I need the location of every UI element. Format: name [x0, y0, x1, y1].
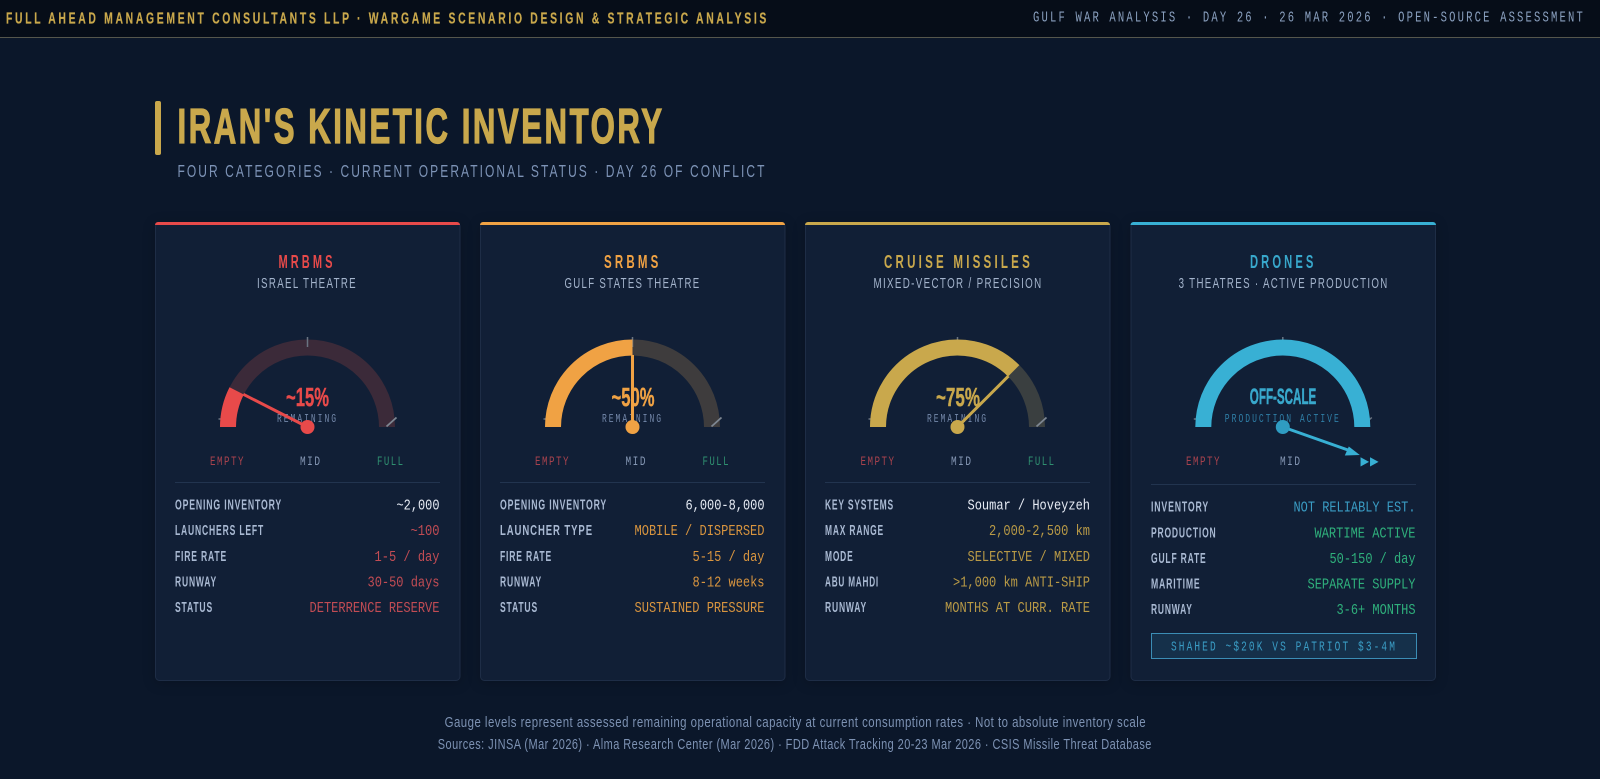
data rows: 1-5 / day — [374, 550, 440, 566]
gauge legend: FULL — [702, 455, 730, 469]
data rows: STATUS — [175, 600, 213, 616]
gauge: 75% remaining — [868, 337, 1046, 434]
card heading: DRONES — [1250, 252, 1316, 272]
data rows: LAUNCHER TYPE — [500, 523, 593, 539]
gauge: off-scale — [1194, 337, 1372, 456]
data rows: RUNWAY — [175, 574, 217, 590]
data rows: ~2,000 — [396, 498, 440, 514]
gauge legend: MID — [626, 455, 647, 469]
header bar — [0, 0, 1600, 38]
title: IRAN'S KINETIC INVENTORY — [178, 100, 664, 154]
data rows — [1151, 500, 1416, 619]
gauge legend: MID — [300, 455, 322, 469]
data rows: >1,000 km ANTI-SHIP — [953, 576, 1090, 592]
panel: MRBMs — [155, 222, 460, 680]
callout: cost comparison: SHAHED ~$20K VS PATRIOT $3-4M — [1171, 640, 1397, 656]
gauge: 50% remaining — [544, 337, 722, 434]
data rows: 50-150 / day — [1330, 552, 1416, 568]
data rows: KEY SYSTEMS — [825, 498, 894, 514]
data rows: FIRE RATE — [500, 549, 552, 565]
footer sources: Sources: JINSA (Mar 2026) · Alma Research Center (Mar 2026) · FDD Attack Tracking 20-23 Mar 2026 · CSIS Missile Threat Database — [438, 737, 1152, 753]
data rows: ABU MAHDI — [825, 574, 879, 590]
data rows: OPENING INVENTORY — [500, 498, 607, 514]
data rows: OPENING INVENTORY — [175, 498, 282, 514]
data rows: MARITIME — [1151, 576, 1200, 592]
gauge legend: ▶▶ — [1360, 454, 1380, 468]
data rows: 3-6+ MONTHS — [1336, 603, 1416, 619]
data rows: SEPARATE SUPPLY — [1308, 578, 1416, 594]
gauge legend — [210, 455, 404, 469]
data rows — [500, 498, 765, 617]
data rows: NOT RELIABLY EST. — [1294, 500, 1416, 516]
data rows — [825, 498, 1090, 617]
gauge legend: MID — [1280, 455, 1302, 469]
data rows: INVENTORY — [1151, 500, 1209, 516]
data rows: Soumar / Hoveyzeh — [968, 498, 1090, 514]
card subheading: MIXED-VECTOR / PRECISION — [874, 276, 1042, 292]
data rows: 5-15 / day — [692, 550, 765, 566]
gauge: 50% remaining: ~50% — [612, 382, 654, 412]
data rows: ~100 — [410, 524, 440, 540]
data rows: RUNWAY — [500, 574, 542, 590]
data rows: SUSTAINED PRESSURE — [634, 601, 764, 617]
data rows: WARTIME ACTIVE — [1314, 526, 1416, 542]
data rows: LAUNCHERS LEFT — [175, 523, 264, 539]
gauge: 15% remaining: REMAINING — [277, 412, 338, 426]
header: firm name: FULL AHEAD MANAGEMENT CONSULTANTS LLP · WARGAME SCENARIO DESIGN & STRATEGIC ANALYSIS — [6, 10, 769, 27]
panel: drones — [1130, 222, 1436, 680]
gauge legend: EMPTY — [860, 455, 896, 469]
data rows — [175, 498, 440, 617]
panel: cruise missiles — [805, 222, 1110, 680]
card heading: MRBMS — [278, 252, 336, 272]
gauge legend: MID — [951, 455, 972, 469]
data rows: MOBILE / DISPERSED — [634, 524, 764, 540]
data rows: SELECTIVE / MIXED — [968, 550, 1090, 566]
panel: SRBMs — [480, 222, 785, 680]
card heading: SRBMS — [604, 252, 662, 272]
gauge: 75% remaining: REMAINING — [927, 412, 988, 426]
subtitle: FOUR CATEGORIES · CURRENT OPERATIONAL STATUS · DAY 26 OF CONFLICT — [178, 161, 766, 181]
data rows: FIRE RATE — [175, 549, 227, 565]
data rows: MAX RANGE — [825, 523, 884, 539]
footer note: Gauge levels represent assessed remaining operational capacity at current consumption rates · Not to absolute inventory scale — [445, 715, 1146, 731]
gauge: 15% remaining: ~15% — [286, 382, 329, 412]
gauge legend: EMPTY — [535, 455, 570, 469]
data rows: DETERRENCE RESERVE — [310, 601, 440, 617]
callout: cost comparison — [1152, 634, 1416, 658]
gauge legend: EMPTY — [1186, 455, 1221, 469]
gauge: 75% remaining: ~75% — [936, 382, 980, 412]
data rows: MONTHS AT CURR. RATE — [945, 601, 1090, 617]
gauge legend — [535, 455, 730, 469]
card subheading: ISRAEL THEATRE — [257, 276, 357, 292]
data rows: STATUS — [500, 600, 538, 616]
gauge legend: FULL — [1028, 455, 1056, 469]
data rows: 8-12 weeks — [692, 576, 764, 592]
gauge: 15% remaining — [218, 337, 396, 434]
data rows: GULF RATE — [1151, 551, 1206, 567]
data rows: 2,000-2,500 km — [989, 524, 1090, 540]
gauge legend: FULL — [377, 455, 404, 469]
title accent bar — [155, 101, 161, 155]
card subheading: GULF STATES THEATRE — [564, 276, 700, 292]
gauge legend: EMPTY — [210, 455, 245, 469]
data rows: 6,000-8,000 — [686, 498, 764, 514]
data rows: MODE — [825, 549, 854, 565]
data rows: PRODUCTION — [1151, 526, 1216, 542]
data rows: RUNWAY — [825, 600, 867, 616]
card heading: CRUISE MISSILES — [884, 252, 1033, 272]
gauge: off-scale: PRODUCTION ACTIVE — [1225, 412, 1341, 426]
gauge: 50% remaining: REMAINING — [602, 412, 663, 426]
gauge legend — [1186, 454, 1380, 469]
data rows: RUNWAY — [1151, 602, 1193, 618]
data rows: 30-50 days — [368, 576, 440, 592]
gauge legend — [860, 455, 1056, 469]
card subheading: 3 THEATRES · ACTIVE PRODUCTION — [1179, 276, 1389, 292]
gauge: off-scale: OFF-SCALE — [1250, 384, 1316, 409]
